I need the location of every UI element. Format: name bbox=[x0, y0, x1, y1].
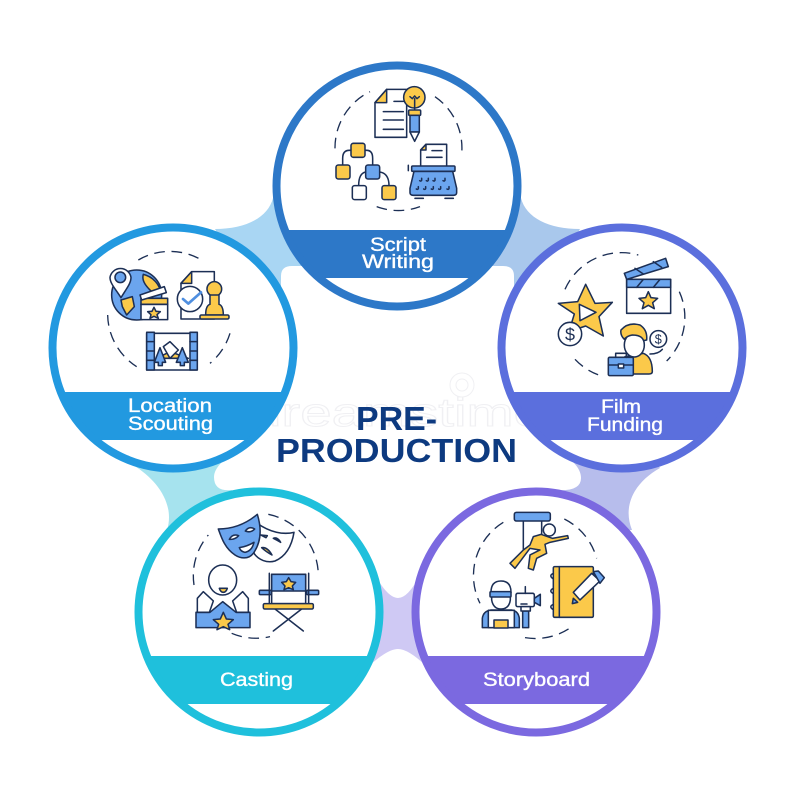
flowchart bbox=[336, 143, 396, 200]
film strip with mountains bbox=[147, 332, 197, 370]
theatre masks bbox=[218, 514, 294, 562]
director chair bbox=[259, 573, 319, 631]
icon group: script writing bbox=[335, 87, 462, 211]
label band: script writing: Script bbox=[370, 235, 427, 256]
icon group: casting bbox=[193, 514, 319, 638]
investor with briefcase: $ bbox=[655, 333, 662, 347]
label band: location scouting: Scouting bbox=[128, 414, 213, 435]
label band: film funding bbox=[514, 392, 730, 440]
connector: script writing to film funding bbox=[475, 198, 580, 290]
panel: location scouting bbox=[46, 228, 300, 468]
icon group: film funding bbox=[558, 253, 685, 376]
document and idea pen bbox=[375, 87, 425, 141]
approved document with stamp bbox=[177, 272, 229, 319]
label band: film funding: Funding bbox=[587, 415, 663, 436]
label band: film funding: Film bbox=[601, 397, 641, 418]
label band: casting: Casting bbox=[220, 670, 293, 691]
icon group: storyboard bbox=[473, 512, 604, 639]
label band: storyboard: Storyboard bbox=[483, 670, 590, 691]
notebook and pencil bbox=[551, 567, 604, 617]
globe with pin and clapperboard bbox=[110, 269, 168, 320]
panel: storyboard bbox=[409, 492, 663, 732]
label band: script writing: Writing bbox=[362, 252, 434, 273]
stunt performer on wires bbox=[510, 512, 568, 570]
watermark bbox=[250, 373, 545, 435]
panel: script writing bbox=[270, 66, 524, 306]
clapperboard bbox=[624, 258, 671, 313]
panel: film funding bbox=[495, 228, 749, 468]
connector: location scouting to casting bbox=[133, 440, 232, 530]
label band: casting bbox=[151, 656, 367, 704]
connector: script writing to location scouting bbox=[215, 198, 320, 290]
watermark: dreamstime bbox=[250, 391, 545, 435]
connector: casting to storyboard bbox=[370, 575, 425, 665]
camera operator bbox=[482, 581, 540, 628]
panel: casting bbox=[132, 492, 386, 732]
title: PRE- bbox=[356, 400, 437, 437]
label band: script writing bbox=[289, 230, 505, 278]
title bbox=[276, 400, 517, 469]
title: PRODUCTION bbox=[276, 432, 517, 469]
connector: film funding to storyboard bbox=[555, 440, 660, 530]
icon group: location scouting bbox=[108, 251, 230, 370]
actor with star bbox=[196, 565, 250, 630]
label band: storyboard bbox=[428, 656, 644, 704]
typewriter bbox=[408, 144, 457, 198]
label band: location scouting: Location bbox=[128, 396, 212, 417]
star with play button and coin: $ bbox=[565, 325, 575, 345]
label band: location scouting bbox=[65, 392, 281, 440]
